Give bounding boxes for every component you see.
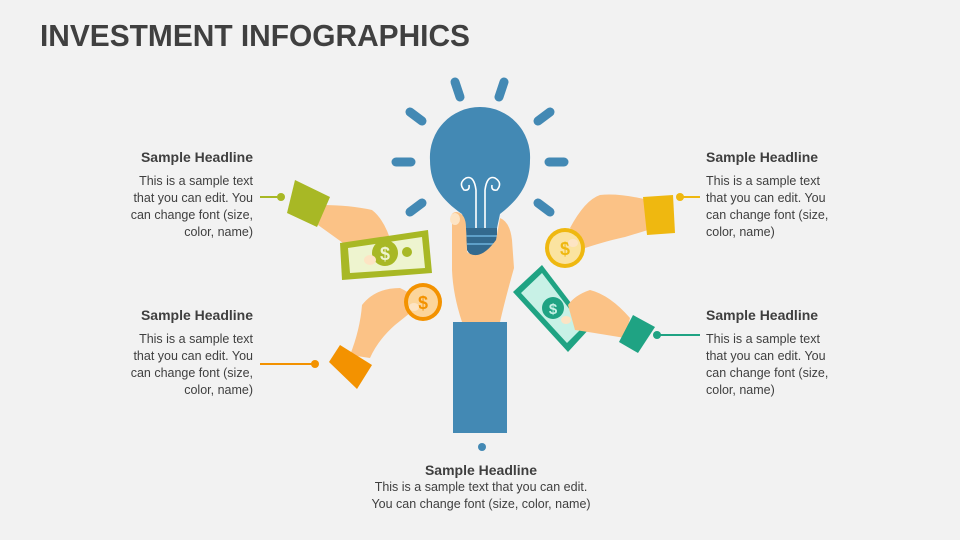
text block: left top: This is a sample text <box>139 174 254 188</box>
text block: right top: can change font (size, <box>706 208 828 222</box>
icon: green hand with bill <box>260 180 432 280</box>
icon: yellow hand with coin: $ <box>560 239 570 259</box>
icon: center hand holding bulb <box>450 212 514 322</box>
text block: right bottom: Sample Headline <box>706 307 818 323</box>
connector: bottom dot <box>478 443 486 451</box>
text block: right top: that you can edit. You <box>706 191 826 205</box>
text block: left bottom <box>131 307 254 397</box>
text block: right bottom: that you can edit. You <box>706 349 826 363</box>
icon: light rays <box>396 82 564 212</box>
icon: yellow hand with coin <box>545 193 700 268</box>
text block: right bottom <box>706 307 828 397</box>
icon: green hand with bill: $ <box>380 244 390 264</box>
text block: bottom: You can change font (size, color, name) <box>371 497 591 511</box>
icon: orange hand with coin <box>260 283 442 389</box>
icon: orange hand with coin: $ <box>418 293 428 313</box>
text block: left top: that you can edit. You <box>133 191 253 205</box>
text block: right bottom: This is a sample text <box>706 332 820 346</box>
text block: right top: Sample Headline <box>706 149 818 165</box>
text block: left top: can change font (size, <box>131 208 253 222</box>
text block: left bottom: can change font (size, <box>131 366 253 380</box>
text block: right bottom: can change font (size, <box>706 366 828 380</box>
text block: right top: color, name) <box>706 225 775 239</box>
text block: left top: Sample Headline <box>141 149 253 165</box>
text block: left top <box>131 149 254 239</box>
text block: left bottom: This is a sample text <box>139 332 254 346</box>
text block: bottom: Sample Headline <box>425 462 537 478</box>
title: INVESTMENT INFOGRAPHICS <box>40 18 470 53</box>
icon: light bulb <box>430 107 530 262</box>
text block: left top: color, name) <box>184 225 253 239</box>
text block: bottom: This is a sample text that you can edit. <box>375 480 587 494</box>
text block: right bottom: color, name) <box>706 383 775 397</box>
icon: teal hand with bill <box>513 265 700 353</box>
icon: center sleeve <box>453 322 507 433</box>
text block: right top <box>706 149 828 239</box>
icon: teal hand with bill: $ <box>549 301 558 318</box>
text block: left bottom: Sample Headline <box>141 307 253 323</box>
text block: bottom <box>371 462 591 511</box>
text block: left bottom: that you can edit. You <box>133 349 253 363</box>
text block: right top: This is a sample text <box>706 174 820 188</box>
text block: left bottom: color, name) <box>184 383 253 397</box>
